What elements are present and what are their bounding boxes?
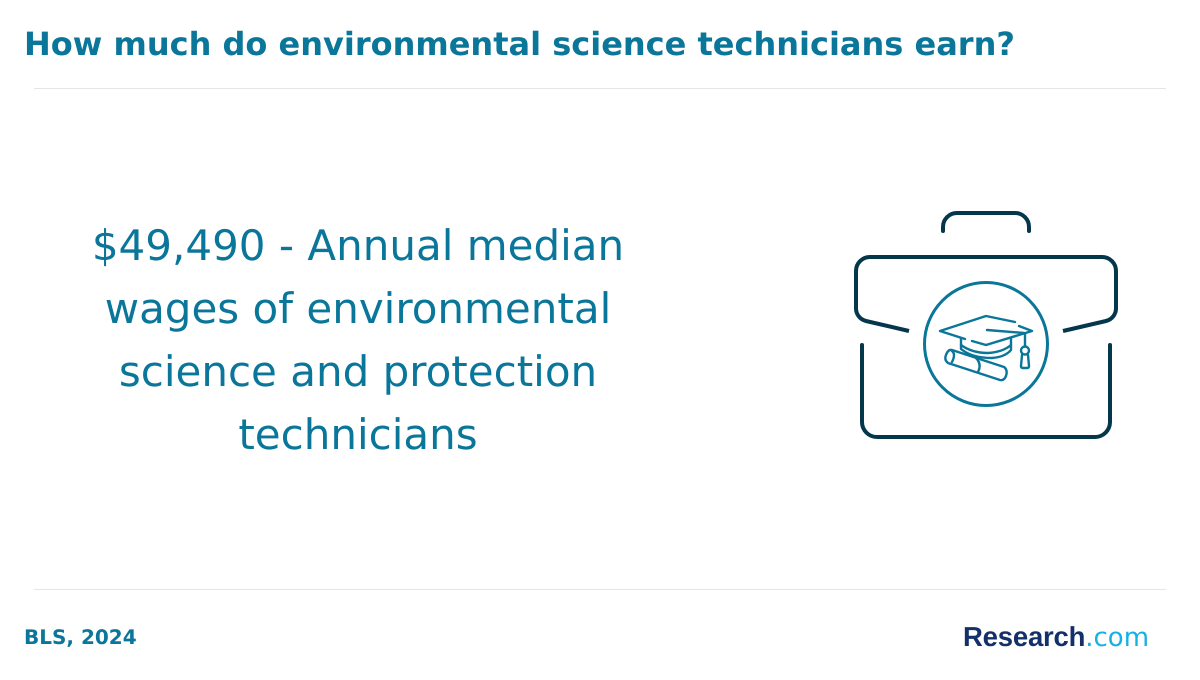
logo: Research.com: Research.com [963, 621, 1149, 653]
main statement text [92, 221, 624, 459]
main statement text: technicians [238, 410, 478, 459]
title: How much do environmental science technicians earn? [24, 25, 1015, 63]
source label: BLS, 2024 [24, 625, 137, 649]
briefcase outline [856, 213, 1116, 437]
graduation cap and diploma badge [924, 282, 1048, 406]
main statement text: $49,490 - Annual median [92, 221, 624, 270]
main statement text: science and protection [119, 347, 597, 396]
icon: briefcase with graduation cap [854, 211, 1118, 439]
main statement text: wages of environmental [105, 284, 611, 333]
